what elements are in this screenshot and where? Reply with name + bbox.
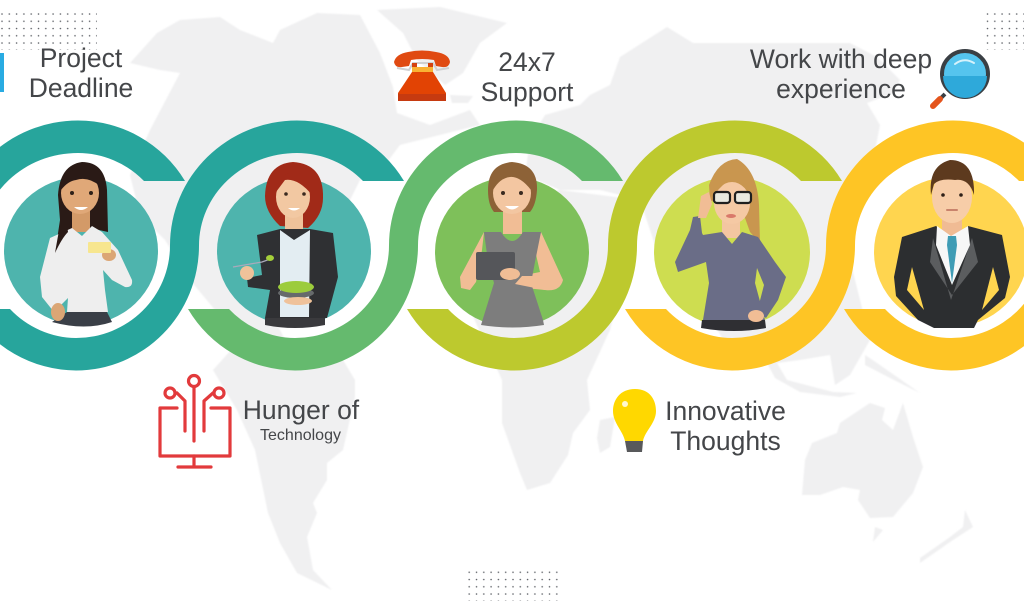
person 4 with glasses: [654, 159, 810, 331]
label: hunger of technology: Hunger of: [243, 395, 360, 425]
icon: yellow light bulb: [613, 389, 656, 452]
icon: magnifying glass: [933, 51, 988, 106]
label: work with deep experience: experience: [776, 74, 906, 104]
label: hunger of technology: Technology: [260, 427, 341, 444]
label: 24x7 support: 24x7: [498, 47, 556, 77]
label: 24x7 support: [481, 47, 574, 107]
label: project deadline: [29, 43, 133, 103]
label: project deadline: Project: [40, 43, 123, 73]
label: innovative thoughts: Innovative: [665, 396, 786, 426]
person 3 with tablet: [435, 162, 589, 328]
icon: red circuit monitor: [160, 376, 230, 467]
dot grid: top right: [983, 13, 1024, 50]
person 1 with business card: [4, 162, 158, 326]
serpentine ribbon: [0, 120, 1024, 370]
dot grid: bottom centre: [464, 570, 561, 601]
world map background: [130, 7, 973, 590]
label: innovative thoughts: [665, 396, 786, 456]
person 5 man in suit: [874, 160, 1024, 328]
person 2 with salad: [217, 162, 371, 328]
label: work with deep experience: Work with deep: [750, 44, 932, 74]
label: hunger of technology: [243, 395, 360, 444]
label: project deadline: Deadline: [29, 73, 133, 103]
label: 24x7 support: Support: [481, 77, 574, 107]
dot grid: top left: [0, 13, 97, 50]
label: innovative thoughts: Thoughts: [670, 426, 781, 456]
icon: red telephone: [394, 50, 450, 101]
blue side bar: [0, 53, 4, 92]
label: work with deep experience: [750, 44, 932, 104]
